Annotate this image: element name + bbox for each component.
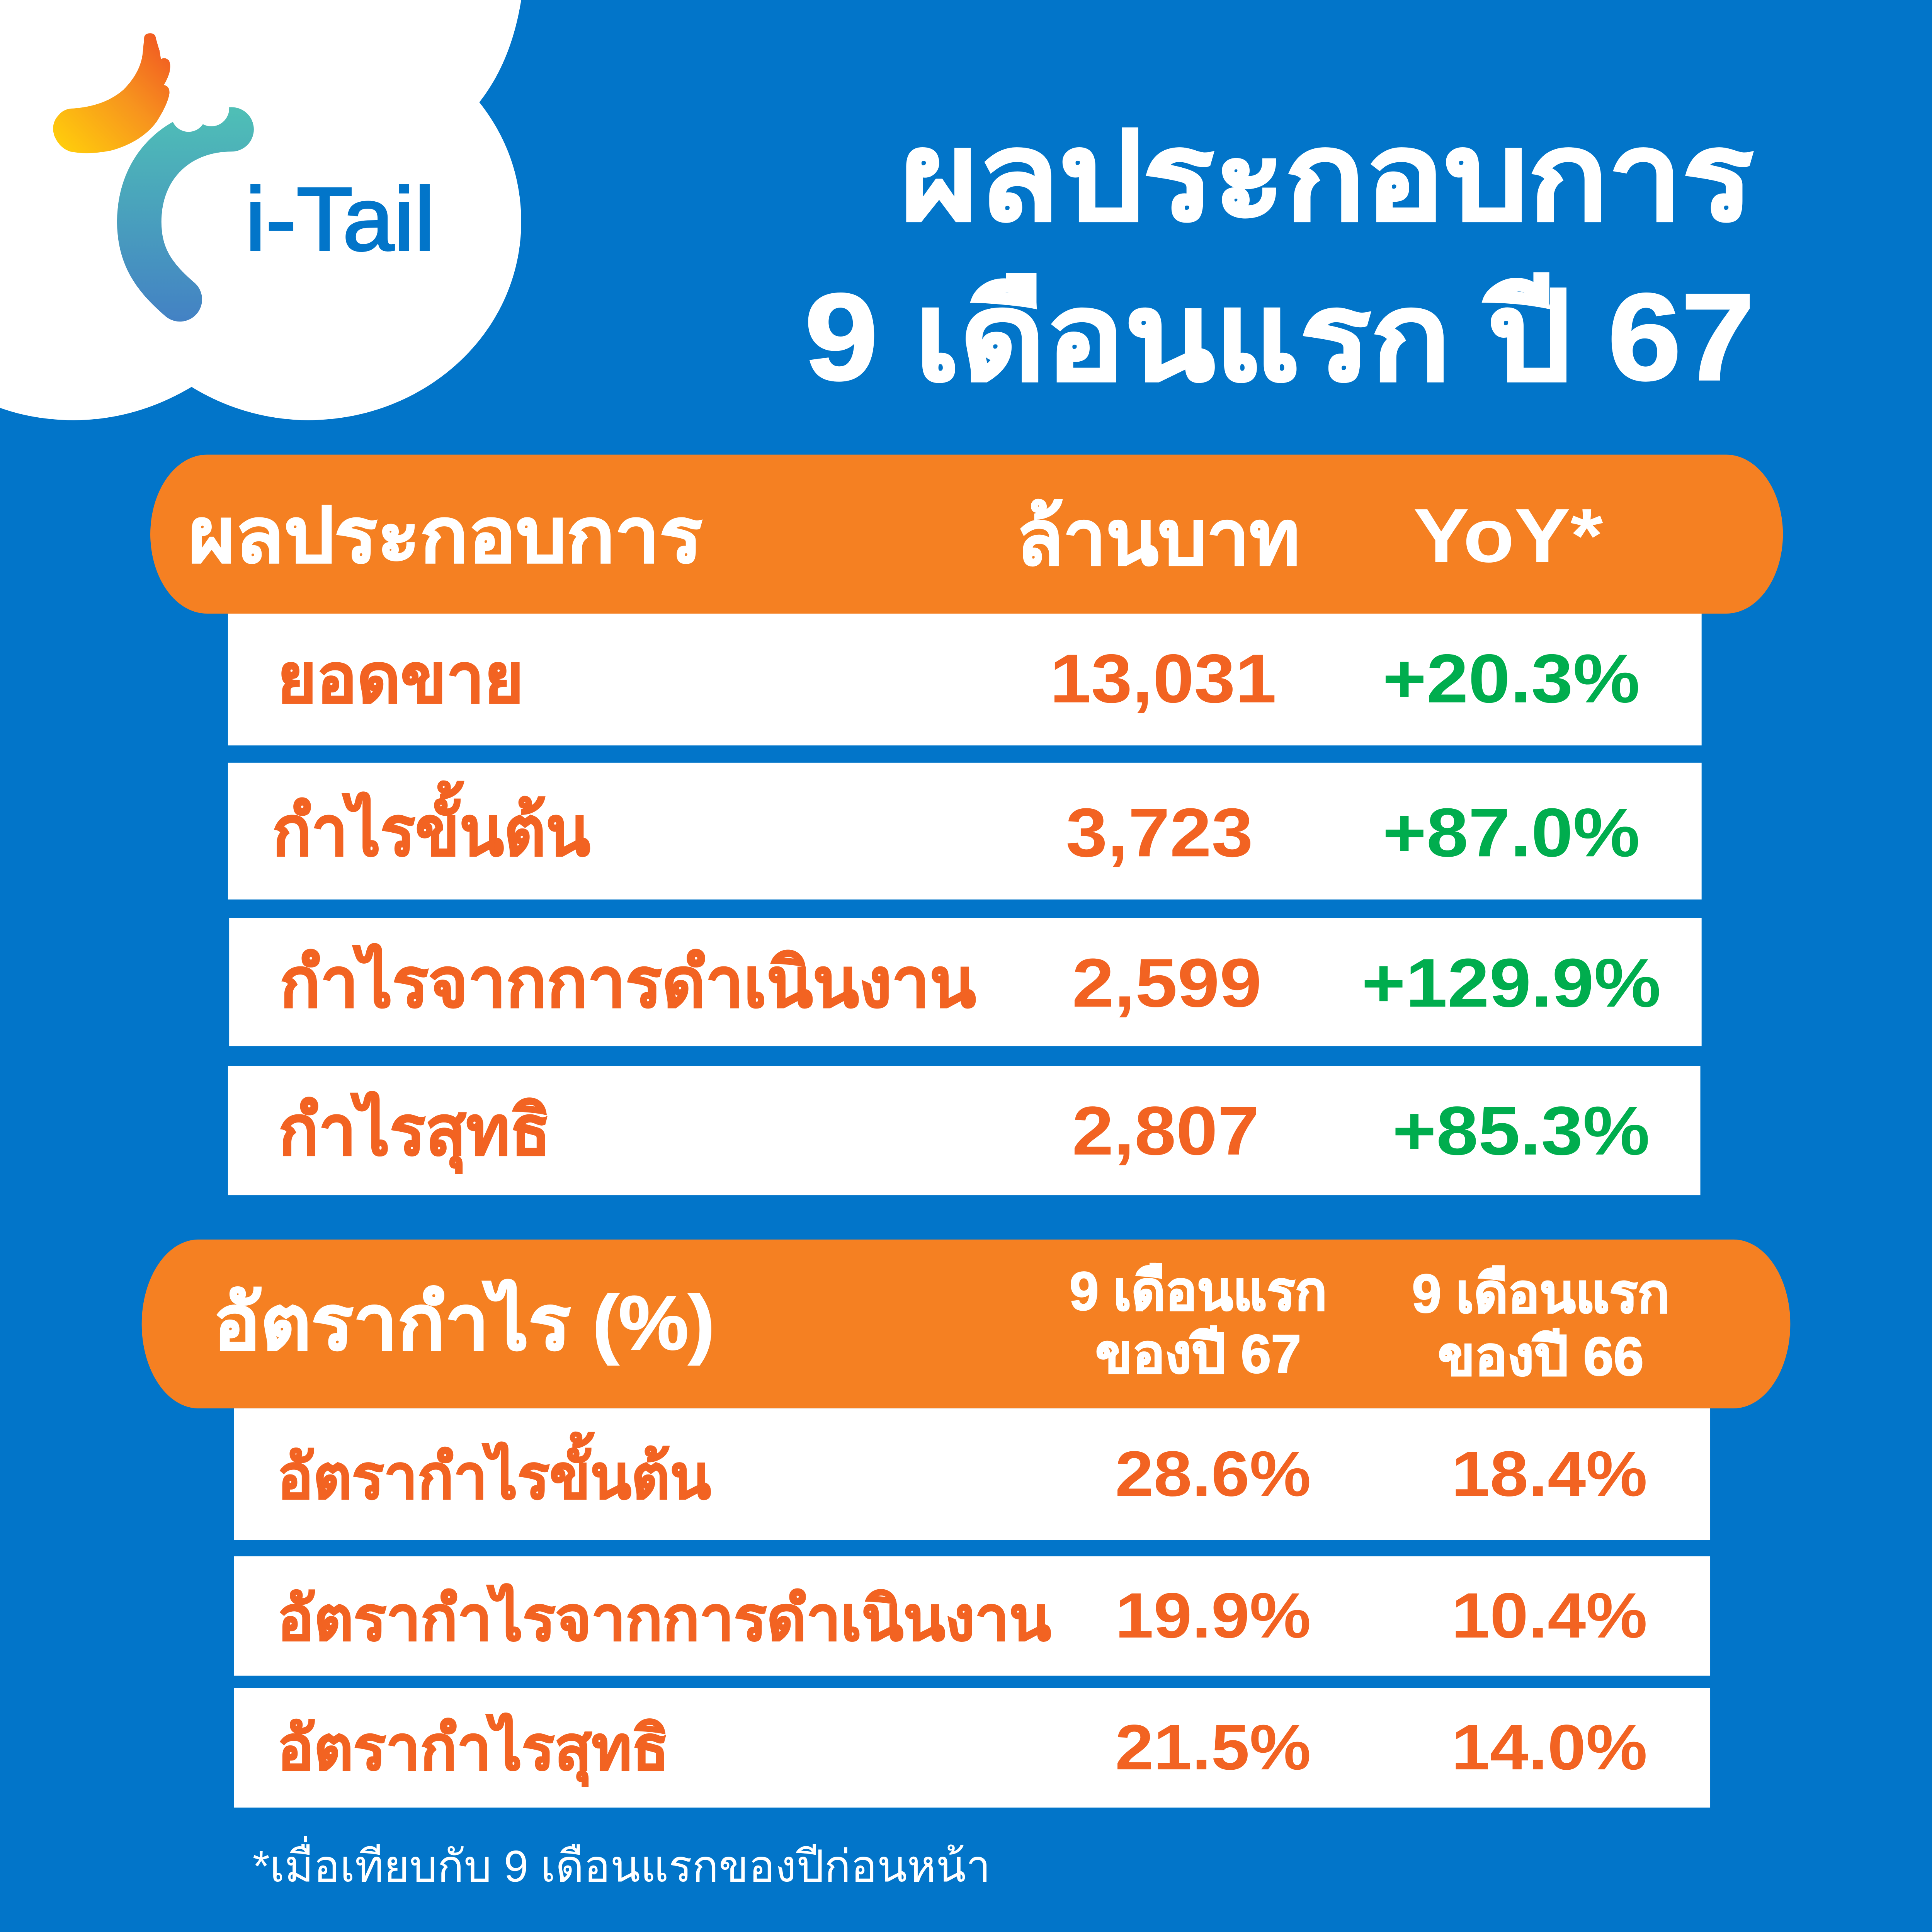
table header: 9 เดือนแรก [1412,1263,1670,1324]
table header: อัตรากำไร (%) [213,1279,714,1366]
row: sales: ยอดขาย [277,640,524,717]
table header: ของปี 67 [1095,1323,1301,1384]
row: net profit [228,1066,1701,1195]
row: net margin [234,1688,1710,1808]
row: operating margin [234,1556,1710,1676]
row: operating profit: กำไรจากการดำเนินงาน [280,944,976,1021]
row: gross profit: +87.0% [1383,794,1640,871]
row: gross profit: 3,723 [1066,794,1253,871]
logo wordmark: i-Tail [245,169,435,269]
table header: ผลประกอบการ [189,493,702,578]
row: net margin: 14.0% [1451,1712,1647,1783]
table header: YoY* [1413,493,1603,578]
footnote: *เมื่อเทียบกับ 9 เดือนแรกของปีก่อนหน้า [253,1836,991,1891]
title: 9 เดือนแรก ปี 67 [804,268,1755,406]
icon: teal tail curve [139,90,231,299]
table header: ล้านบาท [1017,495,1300,580]
panel: results table [150,455,1783,1195]
logo cloud panel [0,0,521,420]
title [804,108,1755,406]
row: sales: +20.3% [1383,640,1640,717]
row: sales: 13,031 [1050,640,1277,717]
row: sales [228,614,1702,745]
row: net margin: 21.5% [1115,1712,1311,1783]
row: operating margin: อัตรากำไรจากการดำเนินงาน [277,1583,1051,1653]
row: operating margin: 10.4% [1451,1580,1647,1651]
row: net profit: 2,807 [1072,1092,1259,1169]
panel: margin table [142,1240,1790,1808]
row: gross margin: 18.4% [1451,1438,1647,1510]
row: gross profit: กำไรขั้นต้น [272,781,590,870]
icon: orange wing [53,33,170,153]
row: gross margin: อัตรากำไรขั้นต้น [277,1432,711,1512]
table header: ของปี 66 [1438,1326,1644,1387]
title: ผลประกอบการ [901,108,1753,246]
row: net margin: อัตรากำไรสุทธิ [277,1713,669,1787]
row: gross profit [228,763,1702,900]
row: gross margin: 28.6% [1115,1438,1311,1510]
row: operating margin: 19.9% [1115,1580,1311,1651]
row: net profit: +85.3% [1392,1092,1650,1169]
icon: i-Tail logo [53,33,435,299]
row: operating profit: +129.9% [1362,944,1661,1021]
row: operating profit [229,918,1702,1046]
table header: 9 เดือนแรก [1070,1261,1327,1321]
row: gross margin [234,1408,1710,1540]
table header [142,1240,1790,1408]
row: operating profit: 2,599 [1072,944,1262,1021]
table header [150,455,1783,614]
row: net profit: กำไรสุทธิ [279,1092,551,1174]
